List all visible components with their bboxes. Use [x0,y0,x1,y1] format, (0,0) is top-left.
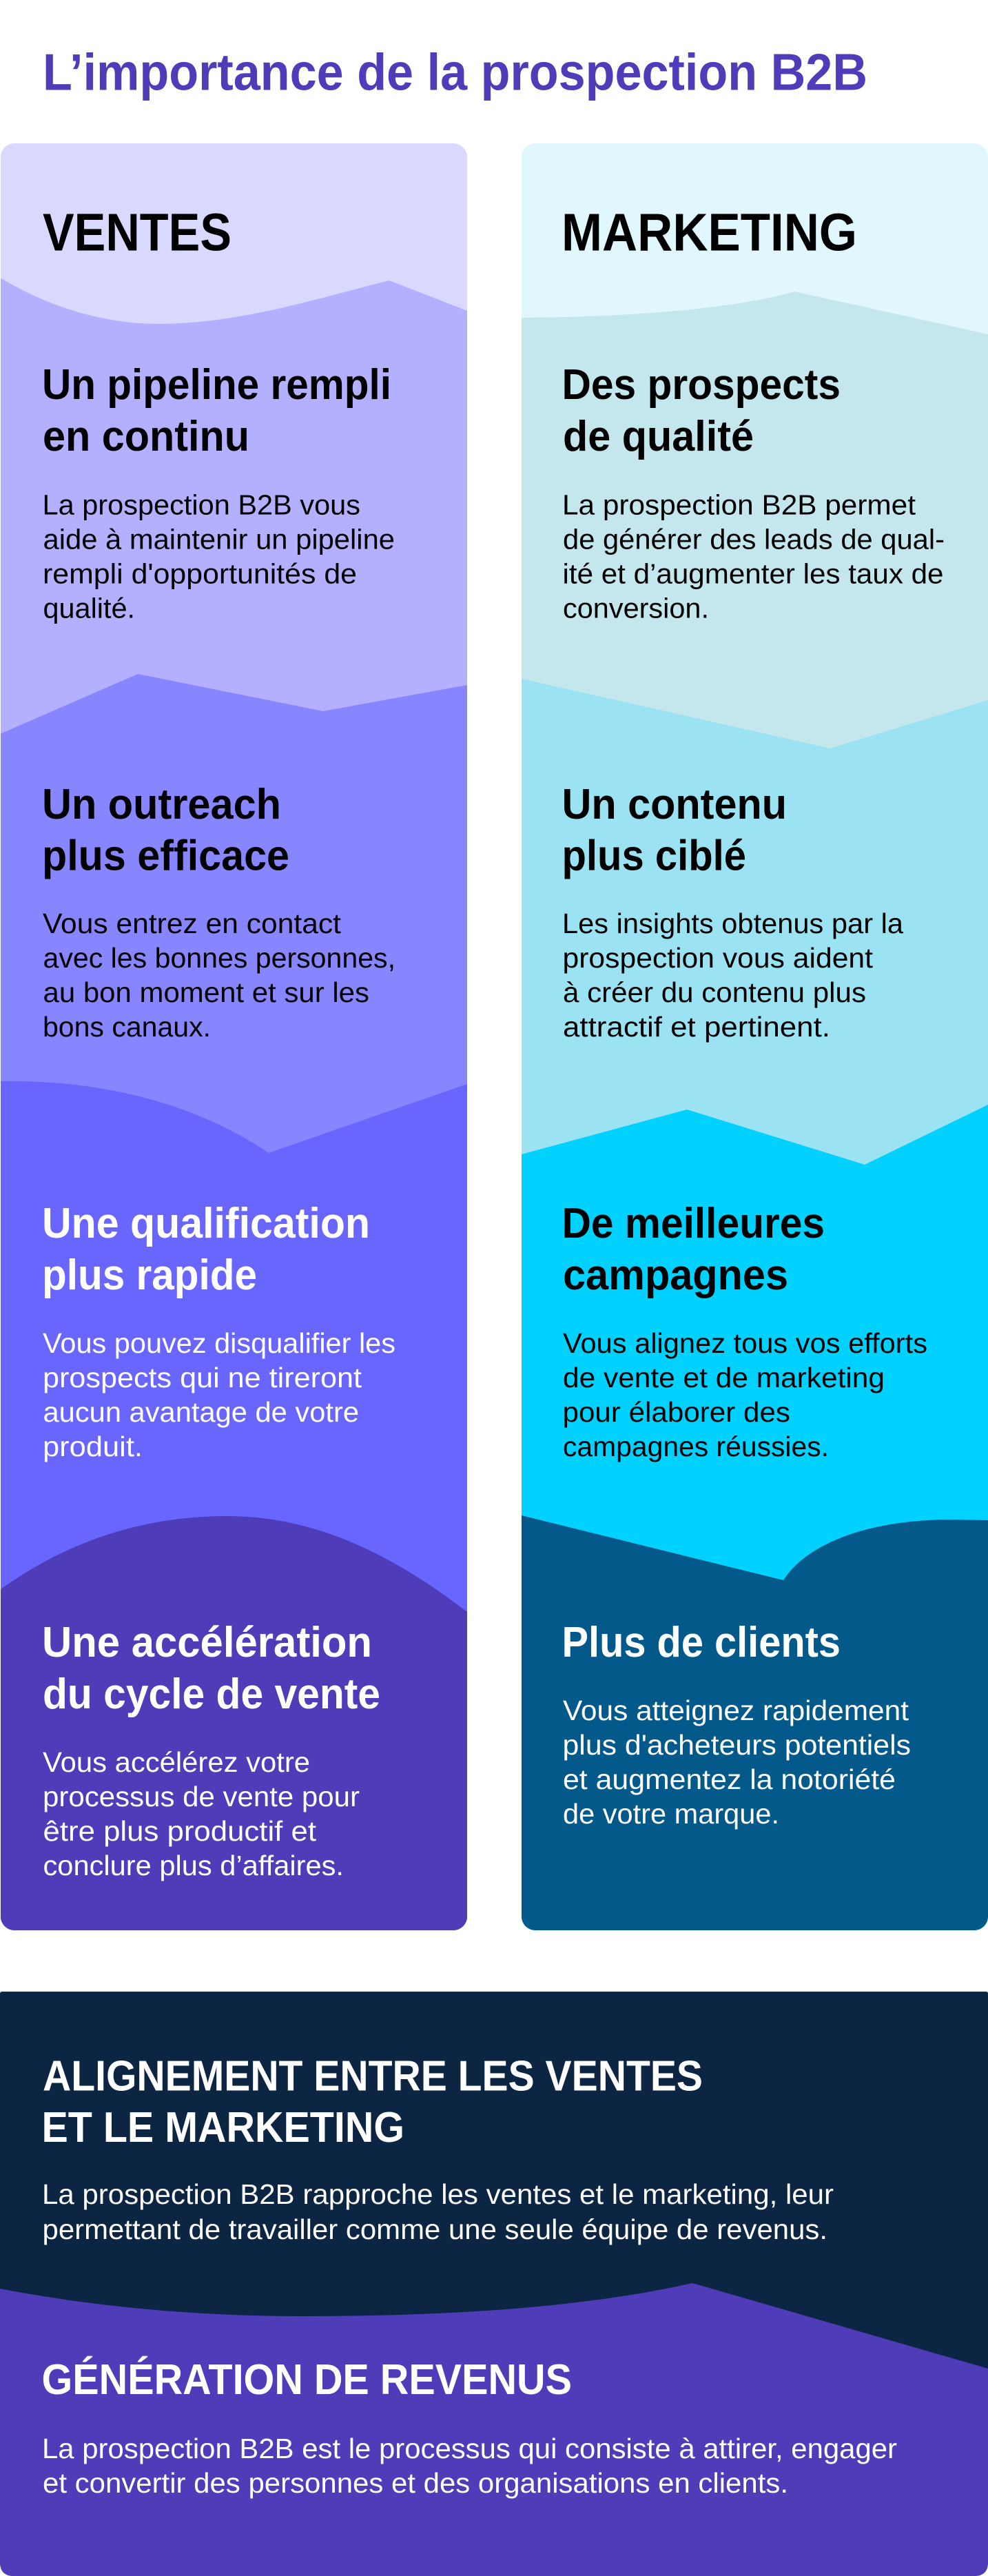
block: un outreach plus efficace: Un outreach [42,781,281,828]
block: plus de clients: de votre marque. [563,1798,779,1830]
panel background bands: ventes [0,143,467,1930]
block: de meilleures campagnes: Vous alignez tous vos efforts [563,1327,927,1359]
block: une accélération du cycle de vente: processus de vente pour [43,1781,360,1812]
block: une qualification plus rapide: plus rapide [42,1251,257,1299]
block: génération de revenus: La prospection B2B est le processus qui consiste à attirer, engager [42,2433,897,2464]
block: une qualification plus rapide: Une qualification [42,1200,370,1247]
block: un pipeline rempli en continu: qualité. [43,593,135,624]
block: une qualification plus rapide: Vous pouvez disqualifier les [43,1327,395,1359]
block: une qualification plus rapide: aucun avantage de votre [43,1396,359,1428]
block: de meilleures campagnes: campagnes réussies. [563,1431,829,1462]
heading: marketing: MARKETING [562,203,857,262]
block: des prospects de qualité: ité et d’augmenter les taux de [562,558,944,590]
block: un outreach plus efficace [42,781,395,1043]
block: de meilleures campagnes: De meilleures [562,1200,825,1247]
block: alignement entre les ventes et le marketing: ALIGNEMENT ENTRE LES VENTES [43,2052,703,2100]
block: un pipeline rempli en continu [42,361,395,624]
block: de meilleures campagnes: pour élaborer des [562,1396,790,1428]
block: un pipeline rempli en continu: aide à maintenir un pipeline [43,524,395,555]
block: un pipeline rempli en continu: La prospection B2B vous [43,489,360,521]
block: un pipeline rempli en continu: Un pipeline rempli [42,361,391,409]
block: un outreach plus efficace: avec les bonnes personnes, [43,942,395,974]
block: des prospects de qualité [562,361,945,624]
block: génération de revenus: et convertir des personnes et des organisations en clients. [43,2467,788,2499]
block: un contenu plus ciblé: plus ciblé [562,832,746,879]
block: plus de clients [562,1619,911,1830]
block: un contenu plus ciblé: à créer du contenu plus [563,977,866,1008]
block: des prospects de qualité: conversion. [563,593,709,624]
panel: marketing [522,143,988,1930]
block: un pipeline rempli en continu: en continu [43,413,249,460]
panel: bottom [0,1992,988,2576]
heading: ventes: VENTES [43,203,231,262]
block: un contenu plus ciblé: attractif et pertinent. [563,1011,830,1043]
block: une accélération du cycle de vente [42,1619,380,1881]
block: une qualification plus rapide: produit. [43,1431,143,1462]
block: un contenu plus ciblé: Les insights obtenus par la [562,908,903,939]
block: des prospects de qualité: Des prospects [562,361,841,409]
title: L’importance de la prospection B2B [43,43,867,101]
block: alignement entre les ventes et le marketing [41,2052,834,2245]
block: une accélération du cycle de vente: Vous accélérez votre [43,1746,310,1778]
block: une accélération du cycle de vente: du cycle de vente [43,1670,380,1718]
block: alignement entre les ventes et le marketing: permettant de travailler comme une seule équipe de revenus. [43,2214,827,2245]
block: un contenu plus ciblé: prospection vous aident [562,942,874,974]
block: alignement entre les ventes et le marketing: La prospection B2B rapproche les ventes et le marketing, leur [42,2178,834,2210]
block: un outreach plus efficace: bons canaux. [43,1011,211,1043]
block: une accélération du cycle de vente: conclure plus d’affaires. [43,1850,344,1881]
block: de meilleures campagnes: campagnes [563,1251,788,1299]
block: de meilleures campagnes [562,1200,927,1462]
block: génération de revenus: GÉNÉRATION DE REVENUS [41,2356,572,2404]
block: un outreach plus efficace: au bon moment et sur les [43,977,369,1008]
block: génération de revenus [41,2356,897,2499]
block: plus de clients: et augmentez la notoriété [563,1764,896,1795]
block: plus de clients: Plus de clients [562,1619,841,1666]
block: plus de clients: plus d'acheteurs potentiels [562,1729,911,1761]
block: de meilleures campagnes: de vente et de marketing [563,1362,885,1393]
block: un outreach plus efficace: plus efficace [42,832,289,879]
block: un contenu plus ciblé [562,781,903,1043]
block: une accélération du cycle de vente: Une accélération [42,1619,372,1666]
block: un outreach plus efficace: Vous entrez en contact [43,908,342,939]
block: des prospects de qualité: La prospection B2B permet [562,489,916,521]
block: plus de clients: Vous atteignez rapidement [563,1695,909,1726]
block: un contenu plus ciblé: Un contenu [562,781,787,828]
block: une qualification plus rapide [42,1200,395,1462]
block: une accélération du cycle de vente: être plus productif et [43,1815,317,1847]
block: des prospects de qualité: de qualité [563,413,754,460]
block: un pipeline rempli en continu: rempli d'opportunités de [43,558,357,590]
panel: ventes [0,143,467,1930]
block: alignement entre les ventes et le marketing: ET LE MARKETING [41,2104,404,2151]
block: des prospects de qualité: de générer des leads de qual- [563,524,945,555]
panel background bands: marketing [522,143,988,1930]
panel background bands: bottom [0,1992,988,2576]
block: une qualification plus rapide: prospects qui ne tireront [43,1362,362,1393]
